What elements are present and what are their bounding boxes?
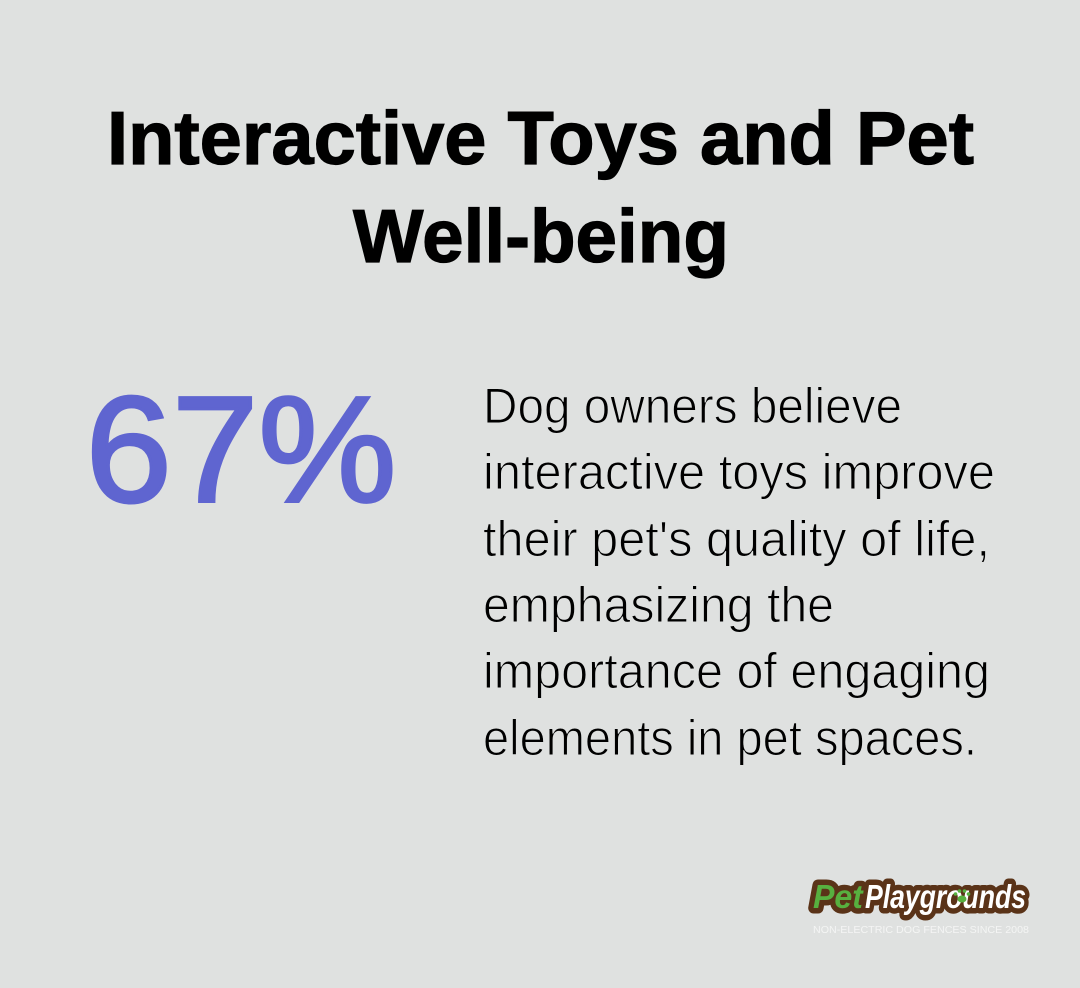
description text: elements in pet spaces. xyxy=(483,709,977,766)
logo wordmark xyxy=(813,878,1026,915)
title xyxy=(107,96,974,278)
logo wordmark: Pet xyxy=(813,878,865,915)
description text: importance of engaging xyxy=(483,642,990,699)
description text: Dog owners believe xyxy=(483,377,902,434)
logo wordmark: Playgrounds xyxy=(865,878,1026,915)
big statistic: 67%: 67% xyxy=(86,364,396,534)
logo: Pet Playgrounds xyxy=(813,878,1029,936)
logo tagline: NON-ELECTRIC DOG FENCES SINCE 2008 xyxy=(813,924,1029,936)
title: Well-being xyxy=(353,194,729,278)
description text: interactive toys improve xyxy=(483,443,995,500)
title: Interactive Toys and Pet xyxy=(107,96,974,180)
icon: paw print xyxy=(954,889,970,902)
description text xyxy=(483,377,995,766)
description text: emphasizing the xyxy=(483,576,834,633)
description text: their pet's quality of life, xyxy=(483,510,990,567)
